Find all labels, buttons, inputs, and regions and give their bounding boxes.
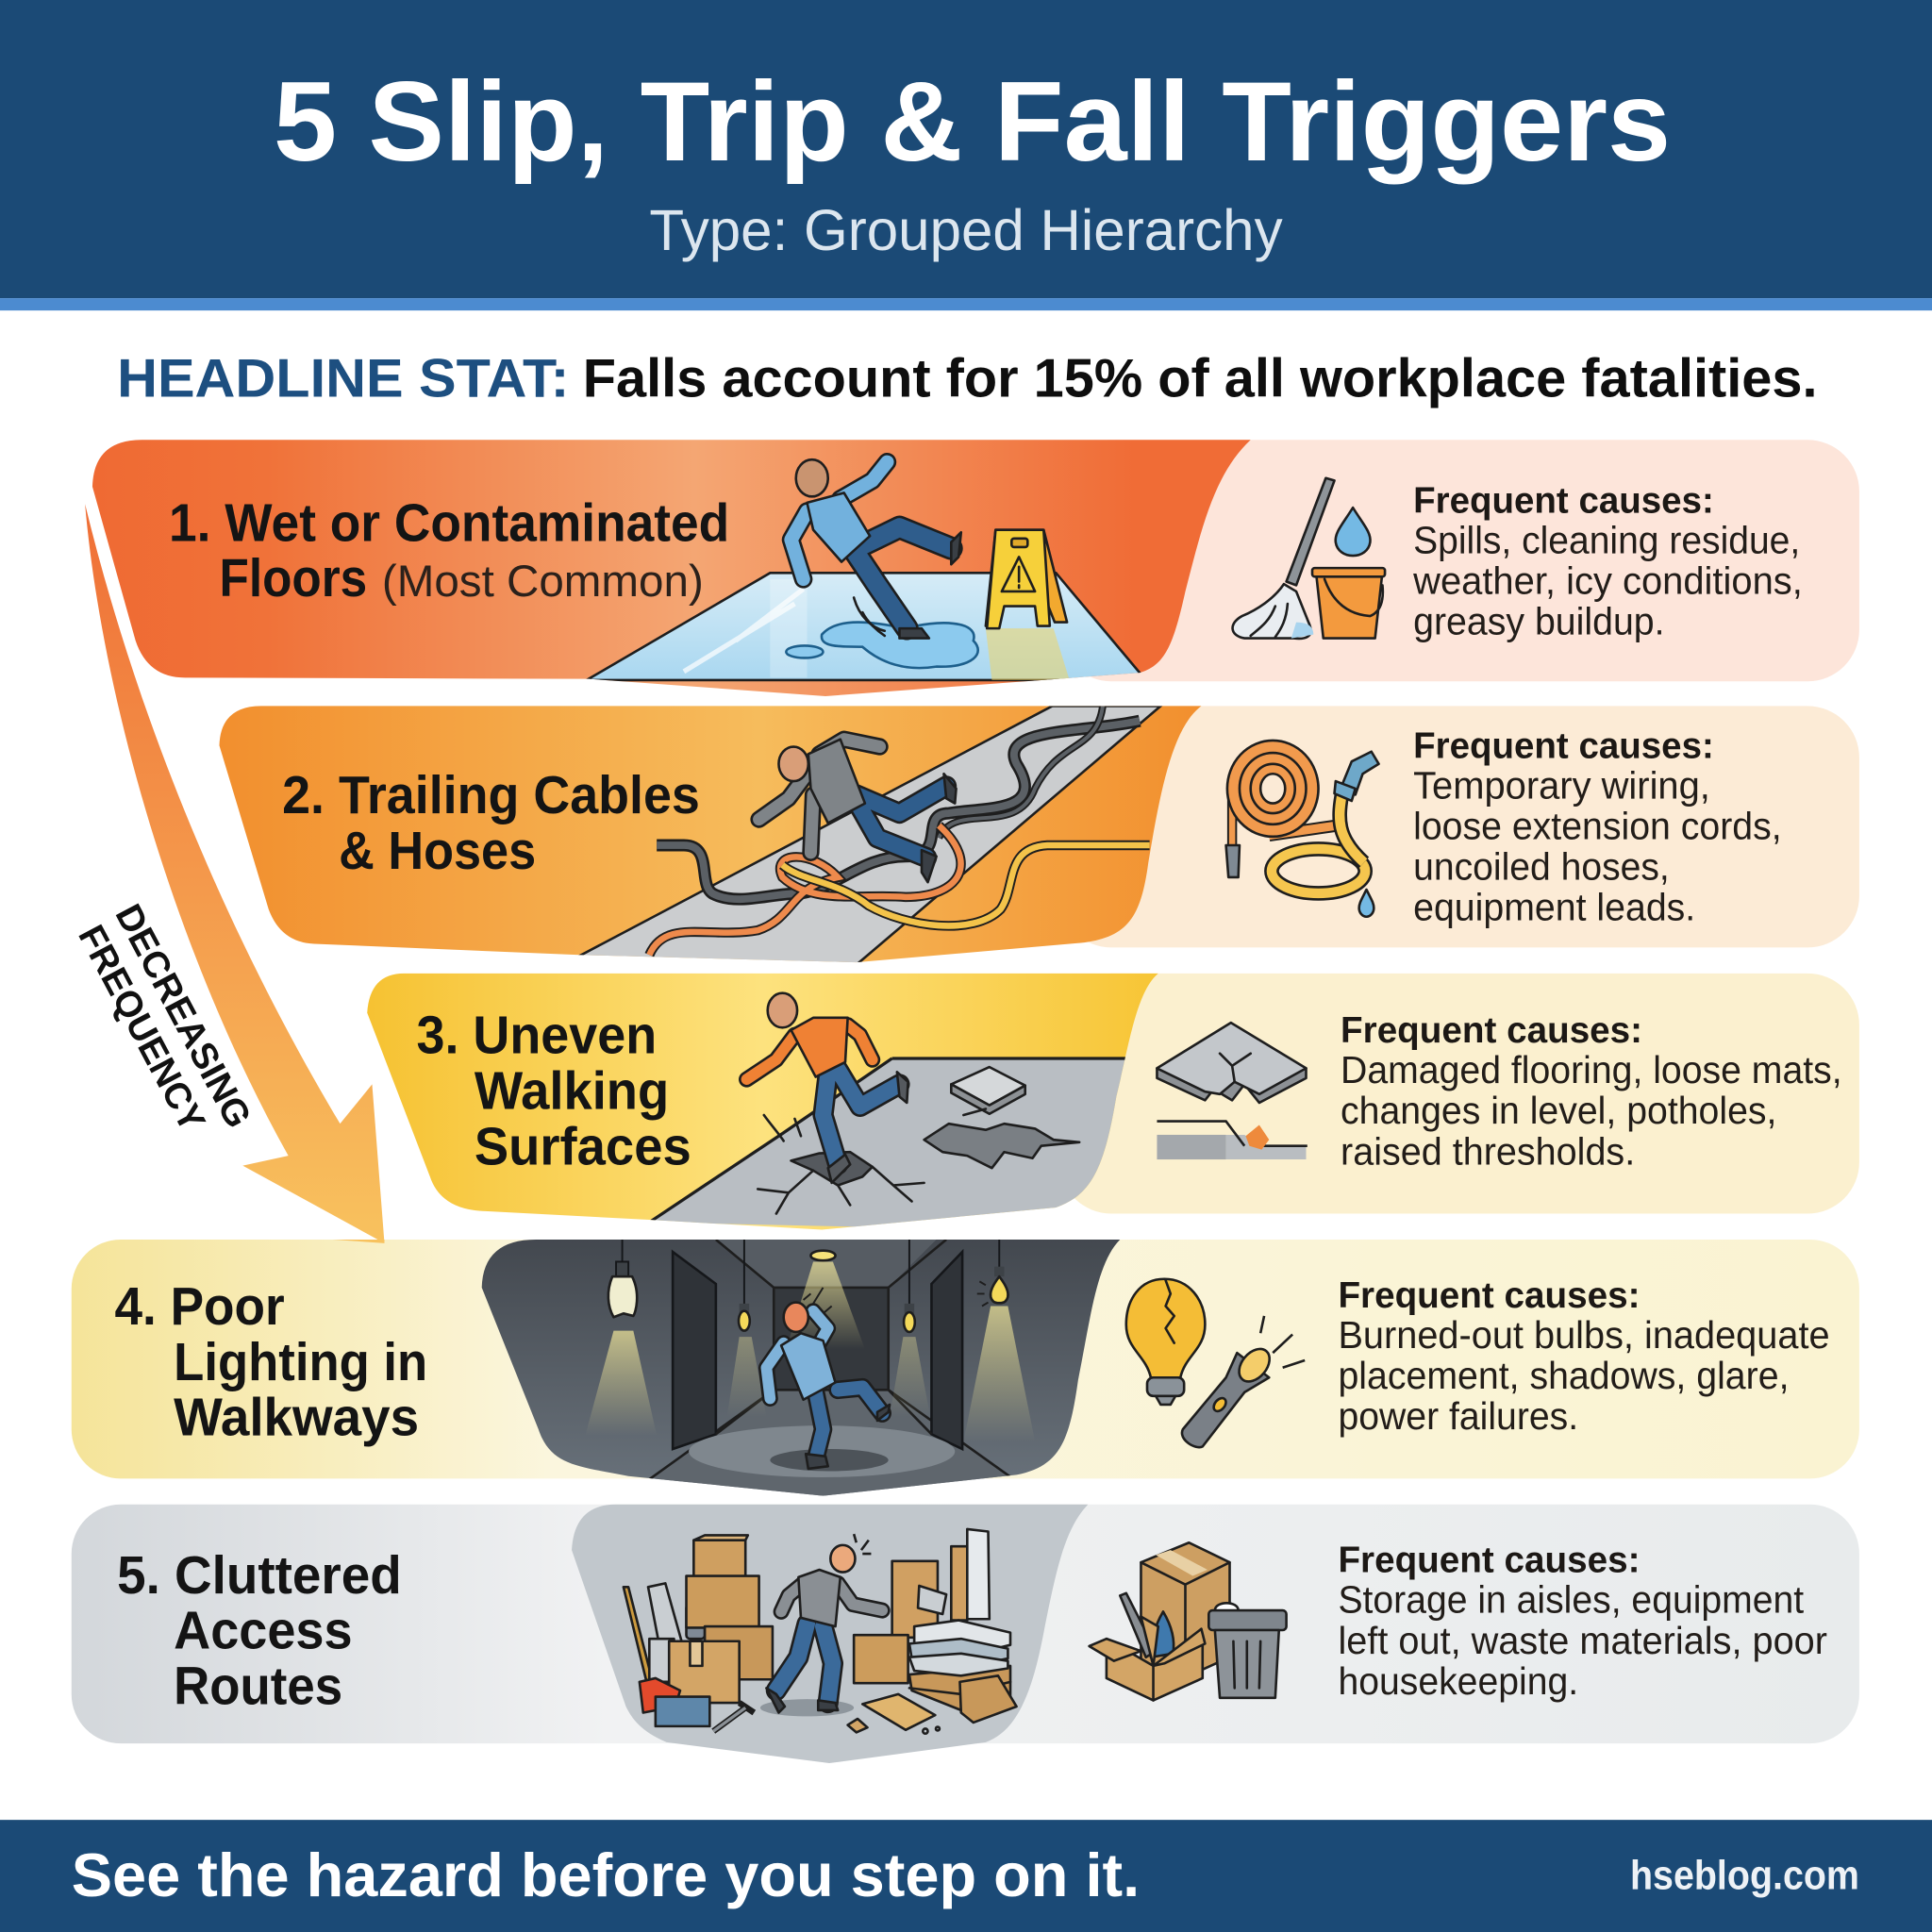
footer website: hseblog.com — [1630, 1853, 1859, 1898]
illustration: dim corridor with person — [585, 1240, 1047, 1503]
row 1 frequent causes text: weather, icy conditions, — [1412, 559, 1803, 603]
row 4 frequent causes text — [1338, 1275, 1830, 1438]
subtitle: Type: Grouped Hierarchy — [649, 198, 1283, 263]
row 1 title — [169, 492, 729, 608]
row 1 causes panel — [1059, 440, 1859, 681]
row 2 title: & Hoses — [339, 821, 536, 880]
row 4 frequent causes text: Frequent causes: — [1338, 1275, 1640, 1316]
row 1: wet or contaminated floors — [92, 440, 1859, 696]
icon: cracked tile and raised threshold — [1157, 1023, 1307, 1159]
row 3 banner — [367, 974, 1158, 1230]
headline stat: HEADLINE STAT: — [117, 349, 569, 409]
row 2 frequent causes text: Frequent causes: — [1413, 725, 1714, 766]
row 4 frequent causes text: power failures. — [1338, 1394, 1578, 1438]
arrow: decreasing frequency — [70, 504, 385, 1243]
row 5 banner — [572, 1505, 1088, 1763]
row 1 title: Floors — [219, 548, 367, 608]
row 3 frequent causes text: Damaged flooring, loose mats, — [1341, 1048, 1842, 1091]
row 5 frequent causes text — [1338, 1541, 1827, 1703]
row 3 title: Walking — [475, 1061, 669, 1121]
row 1 frequent causes text: Frequent causes: — [1413, 480, 1714, 521]
row 4: poor lighting in walkways — [72, 1240, 1859, 1503]
row 3 frequent causes text — [1341, 1010, 1842, 1173]
arrow label: FREQUENCY — [70, 919, 212, 1138]
row 1 banner — [92, 440, 1251, 696]
row 3 frequent causes text: raised thresholds. — [1341, 1129, 1635, 1173]
row 4 title: Walkways — [174, 1388, 419, 1447]
illustration: person stumbling on broken floor — [649, 993, 1127, 1232]
row 5 frequent causes text: housekeeping. — [1338, 1659, 1578, 1703]
row 5 frequent causes text: left out, waste materials, poor — [1338, 1619, 1827, 1662]
row 2 title — [282, 765, 700, 880]
row 3 frequent causes text: changes in level, potholes, — [1341, 1089, 1776, 1132]
row 2: trailing cables and hoses — [219, 706, 1859, 965]
header band — [0, 0, 1932, 310]
icon: boxes, wrench and trash can — [1090, 1542, 1287, 1700]
row 4 title: 4. Poor — [114, 1276, 285, 1336]
icon: coiled hose with nozzle and drip — [1226, 741, 1379, 917]
row 1 frequent causes text — [1412, 480, 1803, 643]
row 2 frequent causes text: uncoiled hoses, — [1413, 845, 1670, 889]
row 2 frequent causes text: equipment leads. — [1413, 886, 1695, 929]
row 5 panel — [72, 1505, 1859, 1743]
headline stat: Falls account for 15% of all workplace fatalities. — [583, 349, 1818, 409]
row 3 frequent causes text: Frequent causes: — [1341, 1010, 1642, 1051]
row 2 frequent causes text — [1413, 725, 1782, 929]
row 4 panel — [72, 1240, 1859, 1478]
row 3 title: Surfaces — [475, 1116, 691, 1175]
row 3 causes panel — [1059, 974, 1859, 1214]
row 1 title: 1. Wet or Contaminated — [169, 492, 729, 552]
row 4 title — [114, 1276, 427, 1447]
illustration: person slipping on wet floor — [587, 459, 1146, 680]
title: 5 Slip, Trip & Fall Triggers — [274, 58, 1671, 185]
row 3 title — [416, 1006, 691, 1175]
illustration: person among boxes and clutter — [624, 1529, 1017, 1734]
row 4 title: Lighting in — [174, 1332, 427, 1391]
row 4 frequent causes text: Burned-out bulbs, inadequate — [1338, 1313, 1830, 1357]
row 5 title: 5. Cluttered — [117, 1545, 402, 1605]
illustration: person tripping over cables — [576, 706, 1160, 965]
row 4 dark banner — [482, 1240, 1120, 1496]
row 5 frequent causes text: Frequent causes: — [1338, 1541, 1640, 1581]
row 3: uneven walking surfaces — [367, 974, 1859, 1232]
row 5 frequent causes text: Storage in aisles, equipment — [1338, 1578, 1804, 1622]
row 4 frequent causes text: placement, shadows, glare, — [1338, 1354, 1789, 1397]
row 5: cluttered access routes — [72, 1505, 1859, 1763]
row 2 frequent causes text: Temporary wiring, — [1413, 763, 1710, 807]
row 5 title — [117, 1545, 402, 1715]
row 1 frequent causes text: greasy buildup. — [1413, 600, 1665, 643]
arrow label: DECREASING — [108, 898, 258, 1135]
arrow tip overlay — [333, 1240, 385, 1243]
row 2 banner — [219, 706, 1201, 962]
row 5 title: Access — [174, 1601, 353, 1660]
row 1 title: (Most Common) — [382, 556, 704, 606]
row 2 causes panel — [1059, 706, 1859, 947]
row 2 title: 2. Trailing Cables — [282, 765, 700, 824]
arrow shape — [85, 504, 385, 1243]
row 5 title: Routes — [174, 1656, 342, 1715]
footer tagline: See the hazard before you step on it. — [72, 1840, 1140, 1909]
icon: mop, bucket and water drop — [1233, 478, 1385, 639]
row 2 frequent causes text: loose extension cords, — [1413, 804, 1782, 847]
icon: broken bulb and flashlight — [1126, 1279, 1305, 1447]
footer band — [0, 1820, 1932, 1932]
row 3 title: 3. Uneven — [416, 1006, 657, 1065]
row 1 frequent causes text: Spills, cleaning residue, — [1413, 518, 1800, 561]
